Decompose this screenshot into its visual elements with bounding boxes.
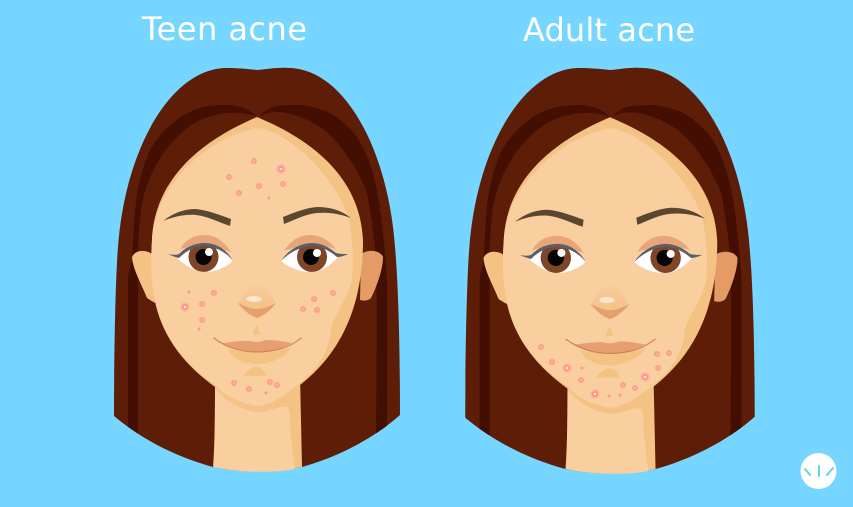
- title: Teen acne: Teen acne: [141, 10, 307, 48]
- acne spots: jawline and chin: [538, 344, 672, 399]
- illustration: adult face: [465, 68, 755, 474]
- acne spots: chin: [231, 379, 280, 394]
- acne spots: left cheek: [180, 290, 217, 330]
- illustration: teen face: [114, 68, 400, 472]
- acne spots: forehead: [226, 158, 286, 200]
- logo badge: [800, 453, 836, 489]
- title: Adult acne: Adult acne: [523, 11, 695, 49]
- acne spots: right cheek: [300, 290, 336, 313]
